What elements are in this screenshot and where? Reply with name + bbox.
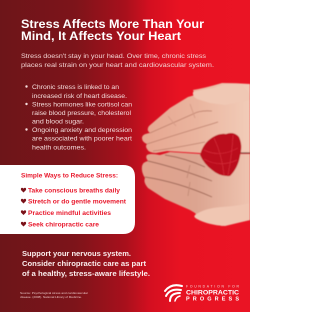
heart bullets <box>21 188 26 226</box>
logo icon <box>165 285 182 301</box>
call to action <box>22 249 150 278</box>
lower thumb <box>194 203 250 226</box>
title: Stress Affects More Than Your <box>21 19 205 31</box>
bullet list <box>25 84 133 152</box>
tips list <box>28 188 127 228</box>
intro text: Stress doesn't stay in your head. Over time, chronic stress <box>21 53 206 60</box>
call to action: of a healthy, stress-aware lifestyle. <box>22 269 150 278</box>
background <box>0 0 250 312</box>
lower finger creases <box>145 155 212 197</box>
upper finger creases <box>147 111 218 151</box>
heart <box>200 133 241 176</box>
bullet list: raise blood pressure, cholesterol <box>32 110 131 117</box>
logo text: PROGRESS <box>186 296 239 302</box>
panel: simple ways to reduce stress <box>0 165 135 234</box>
tips list: Practice mindful activities <box>28 210 111 217</box>
call to action: Consider chiropractic care as part <box>22 259 147 268</box>
source note: disease. (2008). National Library of Medicine. <box>20 295 82 299</box>
upper knuckle shading <box>168 104 195 126</box>
upper hand <box>142 83 250 153</box>
tips list: Stretch or do gentle movement <box>28 198 127 206</box>
panel heading: Simple Ways to Reduce Stress: <box>21 172 118 180</box>
bullet list: Stress hormones like cortisol can <box>32 102 133 108</box>
bullet list: Chronic stress is linked to an <box>32 84 120 91</box>
title: Mind, It Affects Your Heart <box>21 31 181 43</box>
title <box>21 19 205 43</box>
source note: Source: Psychological stress and cardiovascular <box>20 291 88 295</box>
call to action: Support your nervous system. <box>22 249 131 258</box>
bullet list: and blood sugar. <box>32 118 84 126</box>
intro text <box>21 53 214 69</box>
bullet list: increased risk of heart disease. <box>32 93 127 100</box>
logo text <box>186 284 240 302</box>
logo text: CHIROPRACTIC <box>186 290 240 296</box>
tips list: Seek chiropractic care <box>28 222 99 228</box>
intro text: places real strain on your heart and cardiovascular system. <box>21 62 214 69</box>
bullet list: Ongoing anxiety and depression <box>32 127 133 134</box>
tips list: Take conscious breaths daily <box>28 188 120 194</box>
palm crease <box>238 152 250 154</box>
logo text: FOUNDATION FOR <box>186 284 240 288</box>
bullet list: health outcomes. <box>32 144 86 152</box>
upper thumb <box>193 84 250 105</box>
source note <box>20 291 88 299</box>
logo: foundation for chiropractic progress <box>165 284 240 302</box>
photo: hands holding a red heart <box>142 83 250 226</box>
bullet list: are associated with poorer heart <box>32 136 132 142</box>
lower knuckle shading <box>187 165 190 196</box>
lower hand <box>142 152 250 226</box>
